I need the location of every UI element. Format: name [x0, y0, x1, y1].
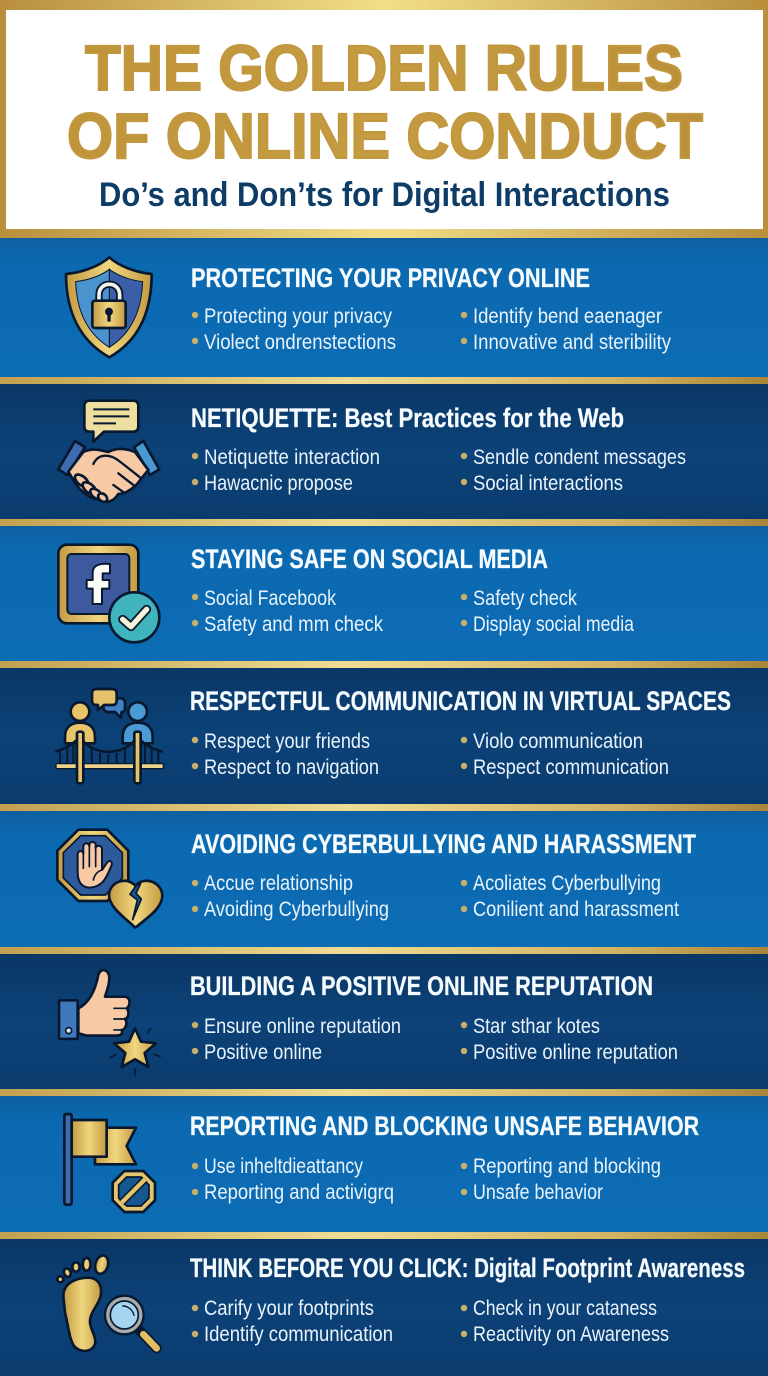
bullet list: Check in your cataness: [473, 1297, 657, 1320]
panel: reporting and blocking: [0, 1096, 768, 1232]
bullet list: Reporting and blocking: [473, 1155, 661, 1178]
bullet list: Netiquette interaction: [204, 446, 380, 469]
title: THE GOLDEN RULES: [85, 32, 683, 104]
bullet list: Unsafe behavior: [473, 1181, 603, 1204]
icon: two people on a bridge: [55, 689, 163, 783]
bullet list: [192, 1015, 678, 1064]
icon: handshake with speech bubble: [58, 401, 159, 504]
bullet list: Social interactions: [473, 472, 623, 495]
heading: PROTECTING YOUR PRIVACY ONLINE: [191, 263, 590, 293]
bullet list: Identify bend eaenager: [473, 305, 662, 328]
bullet list: Respect to navigation: [204, 756, 379, 779]
bullet list: Use inheltdieattancy: [204, 1155, 363, 1178]
bullet list: Acoliates Cyberbullying: [473, 872, 661, 895]
bullet list: Hawacnic propose: [204, 472, 353, 495]
icon: thumbs up with star: [59, 970, 160, 1075]
bullet list: Star sthar kotes: [473, 1015, 600, 1038]
bullet list: Accue relationship: [204, 872, 353, 895]
bullet list: Social Facebook: [204, 587, 336, 610]
bullet list: Identify communication: [204, 1323, 393, 1346]
icon: footprint and magnifier: [57, 1254, 157, 1351]
bullet list: [192, 872, 679, 921]
bullet list: Avoiding Cyberbullying: [204, 898, 389, 921]
bullet list: Sendle condent messages: [473, 446, 686, 469]
icon: flag with prohibition sign: [64, 1114, 155, 1212]
bullet list: Ensure online reputation: [204, 1015, 401, 1038]
bullet list: [192, 446, 686, 495]
bullet list: Respect communication: [473, 756, 669, 779]
subtitle: Do’s and Don’ts for Digital Interactions: [99, 176, 670, 214]
heading: STAYING SAFE ON SOCIAL MEDIA: [191, 544, 548, 574]
bullet list: Reporting and activigrq: [204, 1181, 394, 1204]
panel: online reputation: [0, 954, 768, 1089]
panel: digital footprint: [0, 1239, 768, 1376]
title: [67, 32, 703, 172]
bullet list: [192, 730, 669, 779]
panel: respectful communication: [0, 668, 768, 804]
heading: BUILDING A POSITIVE ONLINE REPUTATION: [190, 971, 653, 1001]
icon: shield with padlock: [66, 257, 152, 357]
panel: cyberbullying: [0, 811, 768, 947]
bullet list: Positive online reputation: [473, 1041, 678, 1064]
panel: protecting privacy: [0, 238, 768, 377]
heading: NETIQUETTE: Best Practices for the Web: [191, 403, 624, 433]
bullet list: Protecting your privacy: [204, 305, 392, 328]
bullet list: Respect your friends: [204, 730, 370, 753]
bullet list: Violo communication: [473, 730, 643, 753]
bullet list: [192, 1297, 669, 1346]
panel: netiquette: [0, 384, 768, 519]
icon: stop hand and broken heart: [57, 830, 162, 928]
panel: social media: [0, 526, 768, 661]
bullet list: [192, 305, 671, 354]
title: OF ONLINE CONDUCT: [67, 100, 703, 172]
bullet list: Conilient and harassment: [473, 898, 679, 921]
icon: facebook tile with check: [58, 545, 159, 642]
bullet list: Carify your footprints: [204, 1297, 374, 1320]
bullet list: Innovative and steribility: [473, 331, 671, 354]
bullet list: Safety check: [473, 587, 577, 610]
header panel: [0, 0, 768, 238]
bullet list: Positive online: [204, 1041, 322, 1064]
bullet list: [192, 1155, 661, 1204]
bullet list: Safety and mm check: [204, 613, 383, 636]
bullet list: [192, 587, 634, 636]
bullet list: Display social media: [473, 613, 634, 636]
bullet list: Reactivity on Awareness: [473, 1323, 669, 1346]
bullet list: Violect ondrenstections: [204, 331, 396, 354]
